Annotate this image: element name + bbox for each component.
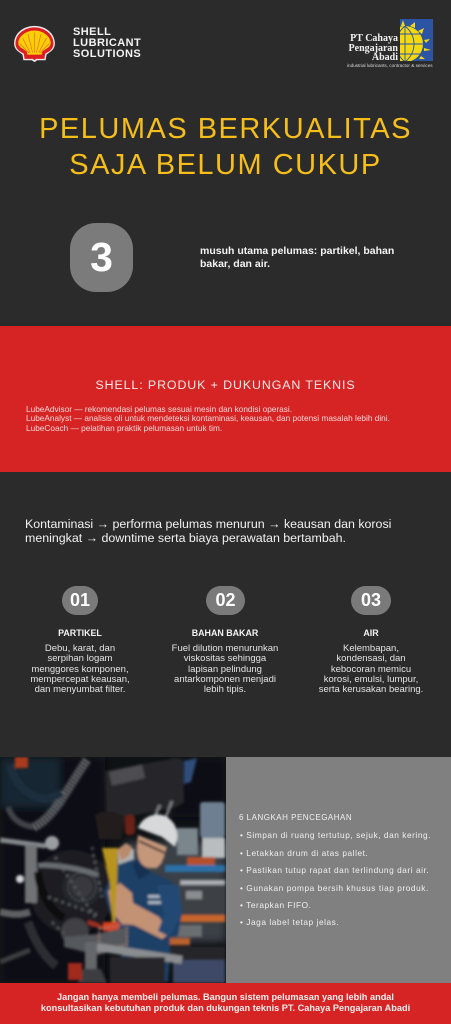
panel body text: LubeAnalyst — analisis oli untuk mendeteksi kontaminasi, keausan, dan potensi masalah lebih dini. bbox=[26, 414, 390, 423]
badge 03: 03 bbox=[361, 590, 381, 610]
column: bahan bakar: BAHAN BAKAR bbox=[192, 628, 258, 638]
badge 01: 01 bbox=[70, 590, 90, 610]
column: partikel: mempercepat keausan, bbox=[30, 674, 130, 685]
badge 03 bbox=[351, 586, 391, 615]
header: PT Cahaya Pengajaran Abadi name: Abadi bbox=[372, 52, 398, 63]
footer call to action: Jangan hanya membeli pelumas. Bangun sistem pelumasan yang lebih andal bbox=[57, 992, 394, 1002]
column: air bbox=[319, 628, 423, 695]
header: PT Cahaya Pengajaran Abadi name bbox=[348, 33, 398, 63]
stat: description bbox=[200, 245, 394, 270]
panel: prevention steps bbox=[226, 757, 451, 983]
column: partikel: menggores komponen, bbox=[31, 664, 129, 675]
column: partikel: PARTIKEL bbox=[58, 628, 102, 638]
header: shell logo bbox=[14, 26, 55, 62]
column: bahan bakar: Fuel dilution menurunkan bbox=[172, 643, 278, 654]
photo: mechanic pouring oil into engine bbox=[0, 757, 226, 983]
panel body text: LubeAdvisor — rekomendasi pelumas sesuai mesin dan kondisi operasi. bbox=[26, 404, 292, 414]
engine block bbox=[30, 850, 114, 934]
column: bahan bakar: lapisan pelindung bbox=[188, 664, 262, 675]
title bbox=[39, 113, 412, 181]
footer call to action: konsultasikan kebutuhan produk dan dukungan teknis PT. Cahaya Pengajaran Abadi bbox=[41, 1002, 410, 1012]
mechanic torso bbox=[104, 858, 182, 982]
forearm and hand bbox=[108, 883, 170, 939]
step 1: • Simpan di ruang tertutup, sejuk, dan kering. bbox=[240, 830, 431, 840]
panel: shell support bbox=[0, 326, 451, 472]
oil stream bbox=[102, 848, 118, 922]
raised hand bbox=[118, 843, 132, 861]
column: partikel: dan menyumbat filter. bbox=[35, 684, 125, 695]
contamination statement bbox=[25, 517, 391, 545]
header: shell lubricant solutions wordmark bbox=[73, 26, 141, 60]
column: bahan bakar: antarkomponen menjadi bbox=[174, 674, 276, 685]
helmet bbox=[138, 815, 177, 847]
engine upper hardware bbox=[105, 758, 184, 819]
column: air: kebocoran memicu bbox=[331, 664, 411, 675]
step 3: • Pastikan tutup rapat dan terlindung dari air. bbox=[240, 865, 429, 875]
title: SAJA BELUM CUKUP bbox=[69, 149, 382, 181]
contamination statement: Kontaminasi → performa pelumas menurun → keausan dan korosi bbox=[25, 517, 391, 531]
column: bahan bakar: viskositas sehingga bbox=[184, 653, 266, 664]
panel body text: LubeCoach — pelatihan praktik pelumasan untuk tim. bbox=[26, 424, 222, 432]
column: air: serta kerusakan bearing. bbox=[319, 684, 423, 695]
header: PT Cahaya globe logo bbox=[400, 19, 433, 61]
step 6: • Jaga label tetap jelas. bbox=[240, 917, 339, 927]
column: air: AIR bbox=[363, 628, 379, 638]
badge 02 bbox=[206, 586, 245, 615]
footer call to action bbox=[0, 983, 451, 1024]
step 5: • Terapkan FIFO. bbox=[240, 900, 312, 910]
header: PT Cahaya Pengajaran Abadi name: PT Cahaya bbox=[350, 33, 398, 44]
column: partikel: Debu, karat, dan bbox=[45, 643, 115, 654]
mechanic glasses bbox=[139, 841, 165, 853]
header: PT Cahaya Pengajaran Abadi name: Pengajaran bbox=[349, 43, 398, 54]
red funnel bbox=[103, 922, 119, 931]
stat: number 3 badge bbox=[70, 223, 133, 292]
panel heading: SHELL: PRODUK + DUKUNGAN TEKNIS bbox=[95, 378, 356, 392]
panel body text bbox=[26, 404, 390, 432]
contamination statement: meningkat → downtime serta biaya perawatan bertambah. bbox=[25, 531, 346, 545]
metal rack bbox=[64, 927, 128, 955]
header: company tagline: industrial lubricants, contractor & services bbox=[347, 62, 433, 68]
column: partikel: serpihan logam bbox=[48, 653, 112, 664]
column: bahan bakar: lebih tipis. bbox=[204, 684, 246, 695]
badge 02: 02 bbox=[215, 590, 236, 610]
column: bahan bakar bbox=[172, 628, 278, 695]
column: air: korosi, emulsi, lumpur, bbox=[324, 674, 418, 685]
column: air: Kelembapan, bbox=[343, 643, 399, 654]
stat: description: bakar, dan air. bbox=[200, 258, 270, 270]
prevention heading: 6 LANGKAH PENCEGAHAN bbox=[239, 813, 352, 822]
step 4: • Gunakan pompa bersih khusus tiap produk. bbox=[240, 882, 429, 892]
stat: number 3 badge: 3 bbox=[90, 234, 113, 280]
column: partikel bbox=[30, 628, 130, 695]
header: shell lubricant solutions wordmark: SHELL bbox=[73, 26, 111, 38]
header: shell lubricant solutions wordmark: SOLUTIONS bbox=[73, 48, 141, 60]
stat: description: musuh utama pelumas: partikel, bahan bbox=[200, 245, 394, 257]
header: shell lubricant solutions wordmark: LUBRICANT bbox=[73, 36, 141, 48]
step 2: • Letakkan drum di atas pallet. bbox=[240, 848, 368, 858]
badge 01 bbox=[62, 586, 98, 615]
shop background bbox=[200, 802, 225, 838]
mechanic face bbox=[137, 835, 167, 868]
title: PELUMAS BERKUALITAS bbox=[39, 113, 412, 145]
column: air: kondensasi, dan bbox=[336, 653, 406, 664]
